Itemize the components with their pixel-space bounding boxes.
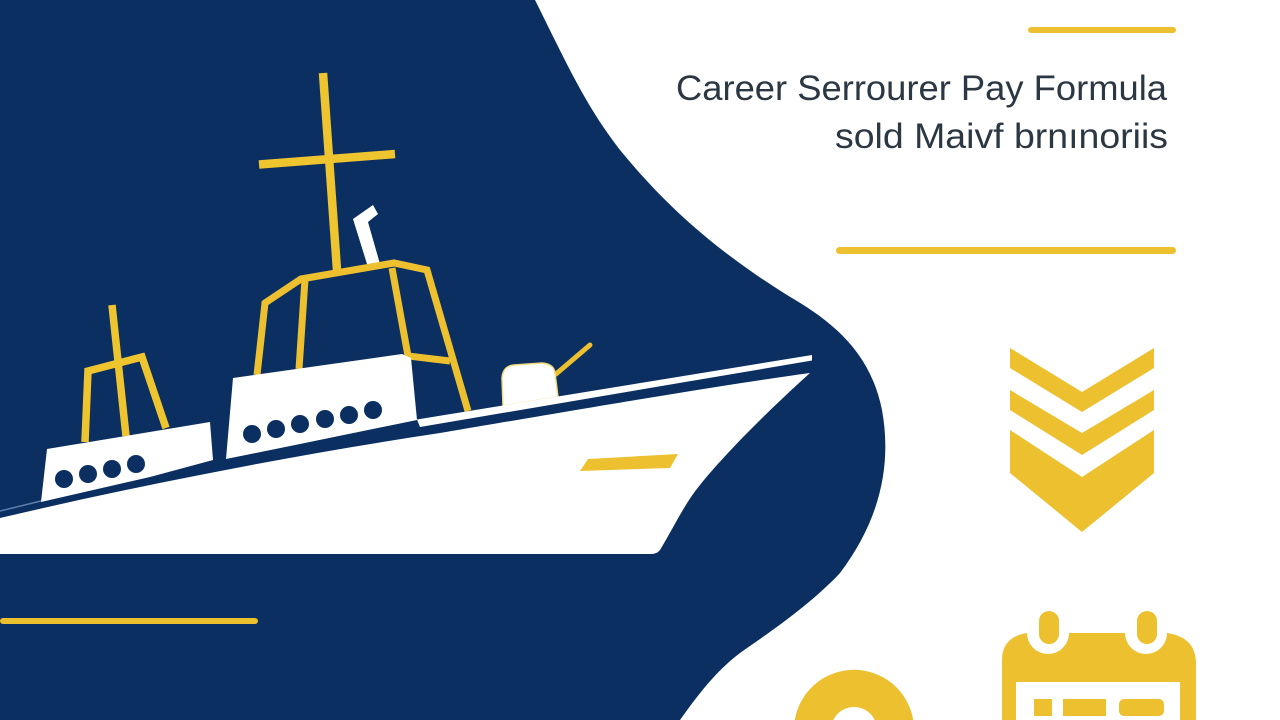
icon: calendar: [1002, 611, 1196, 720]
heading: sold Maivf brnınoriis: [835, 117, 1168, 156]
icon: partial circle badge: [795, 670, 913, 720]
navy background blob: [0, 0, 885, 720]
lower left accent line: [0, 618, 258, 624]
rear mast frame: [85, 305, 166, 442]
thin deck edge at stern: [0, 501, 41, 511]
heading accent line top: [1028, 27, 1176, 33]
white hull: [0, 373, 810, 554]
ship illustration: [0, 73, 812, 554]
bridge frame: [257, 263, 468, 411]
hull accent stripe: [580, 454, 678, 471]
upper deck white line: [417, 355, 812, 427]
heading: Career Serrourer Pay Formula: [676, 69, 1168, 108]
icon: rank chevrons: [1010, 348, 1154, 532]
main mast: [259, 73, 395, 270]
forward superstructure: [226, 354, 417, 459]
gun turret: [502, 345, 590, 406]
rear superstructure: [41, 422, 213, 502]
white funnel: [353, 205, 380, 264]
heading: [676, 69, 1168, 156]
heading accent line bottom: [836, 247, 1176, 254]
